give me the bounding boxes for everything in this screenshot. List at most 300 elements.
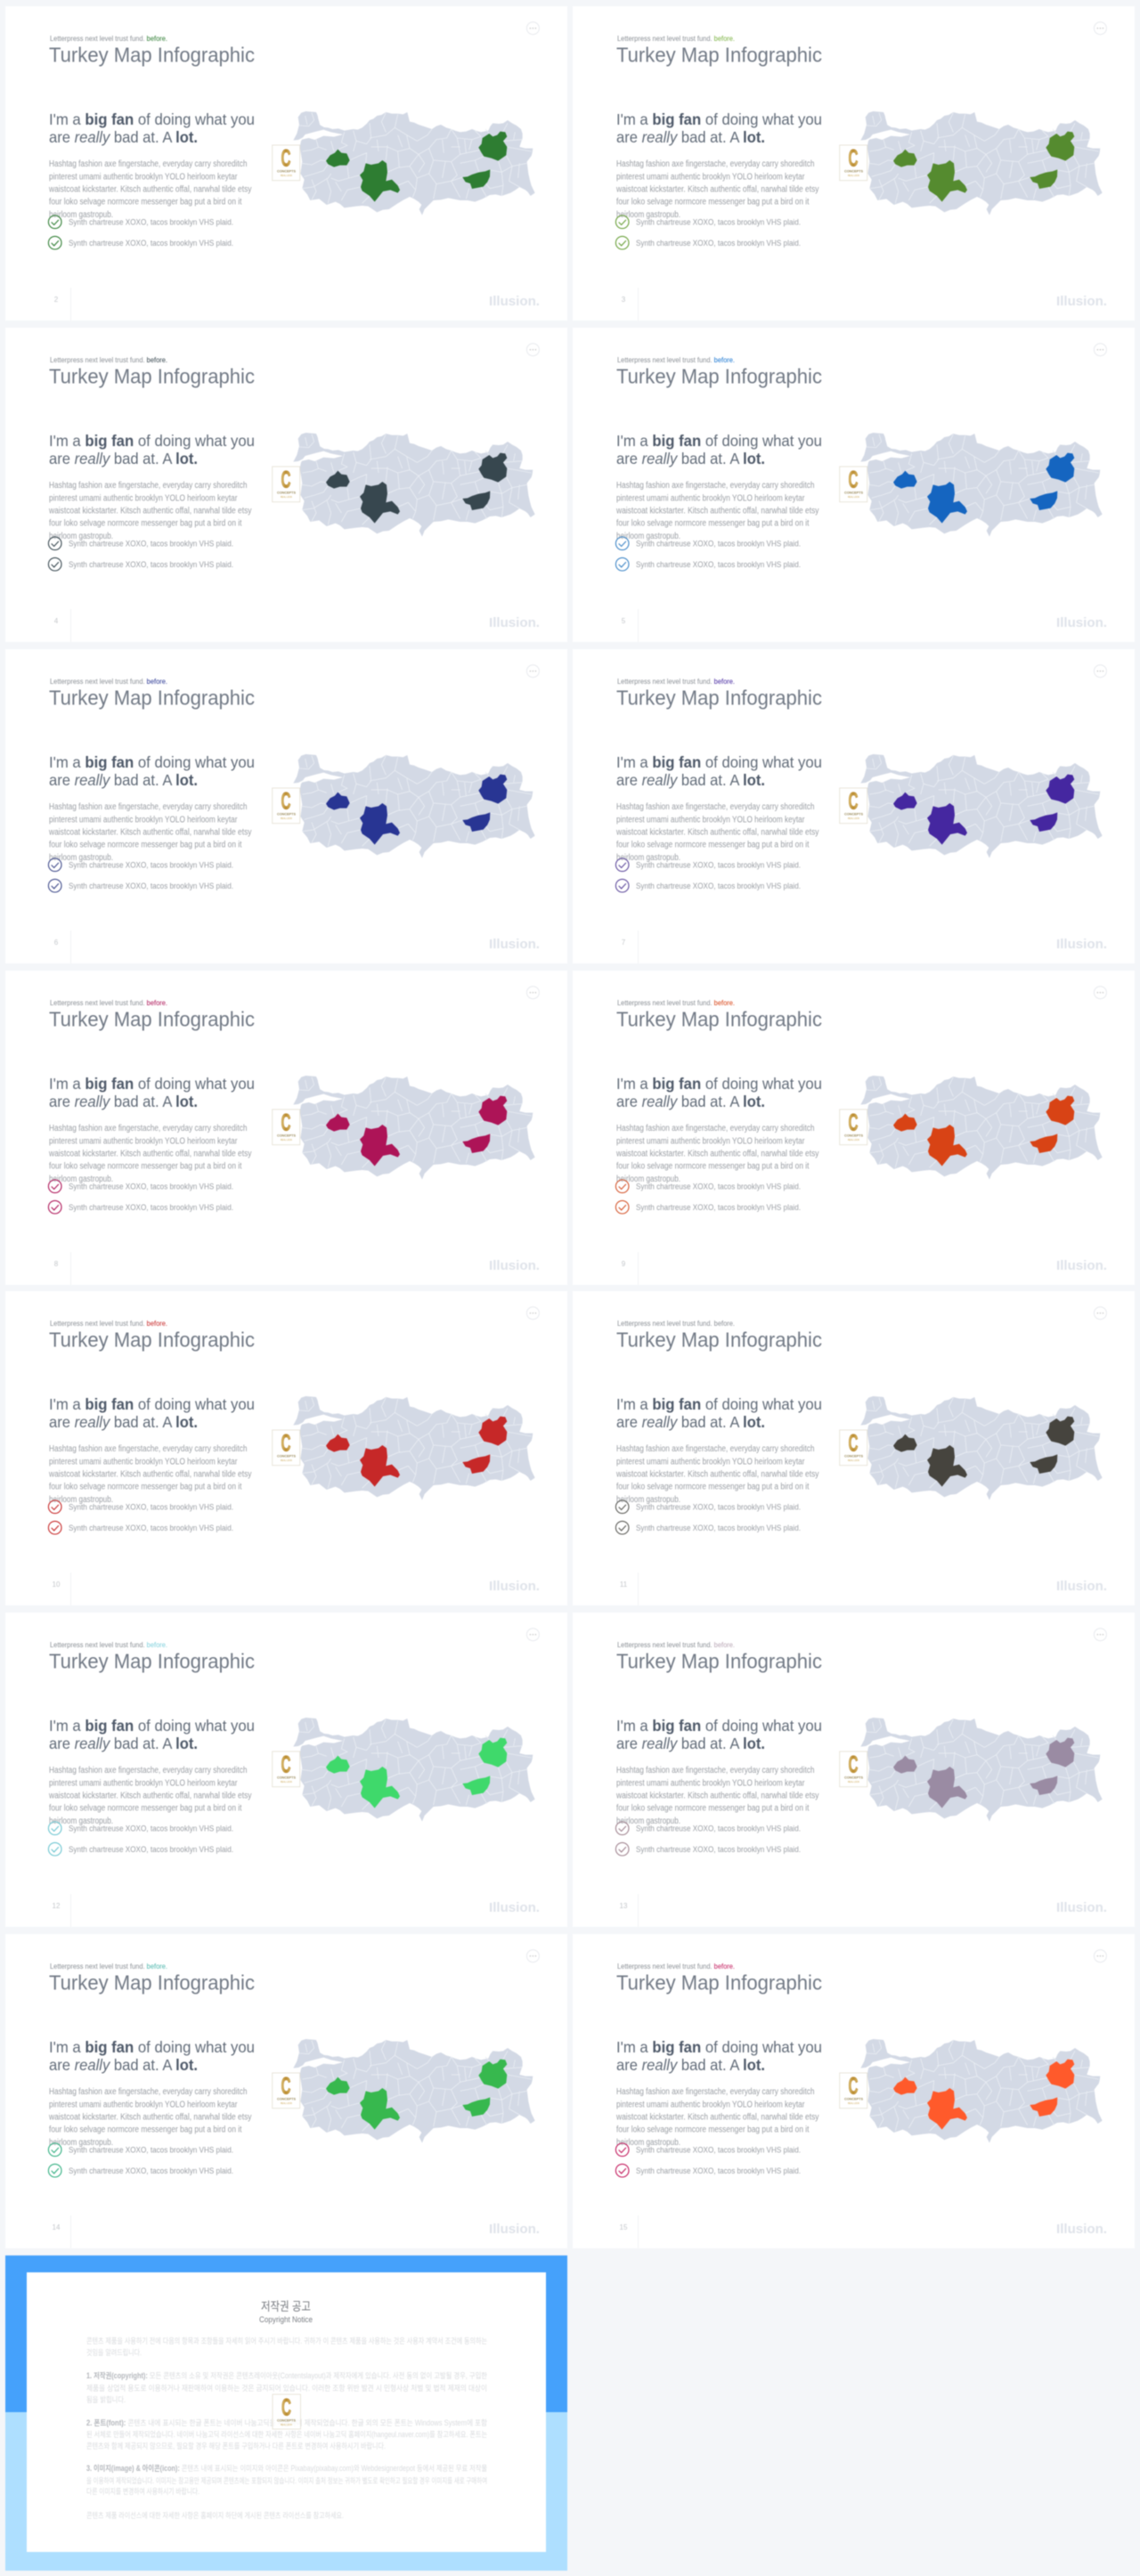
body text <box>615 1766 819 1826</box>
page number: 2 <box>54 296 59 304</box>
logo <box>273 144 300 181</box>
body text: pinterest umami authentic brooklyn YOLO heirloom keytar <box>616 2100 805 2110</box>
checklist: Synth chartreuse XOXO, tacos brooklyn VHS plaid. <box>69 540 233 549</box>
checklist <box>615 537 801 571</box>
body text: Hashtag fashion axe fingerstache, everyday carry shoreditch <box>616 2087 814 2097</box>
menu dots icon <box>526 665 539 678</box>
checklist: Synth chartreuse XOXO, tacos brooklyn VHS plaid. <box>636 882 801 891</box>
body text: waistcoat kickstarter. Kitsch authentic offal, narwhal tilde etsy <box>615 828 819 837</box>
body text: Hashtag fashion axe fingerstache, everyday carry shoreditch <box>49 1766 248 1776</box>
body text: Hashtag fashion axe fingerstache, everyday carry shoreditch <box>616 1766 814 1776</box>
checklist: Synth chartreuse XOXO, tacos brooklyn VHS plaid. <box>636 1524 801 1533</box>
page number <box>53 2215 71 2248</box>
logo: REAL LOOK <box>848 174 859 177</box>
turkey map <box>860 2039 1103 2143</box>
page number: 10 <box>53 1581 61 1589</box>
eyebrow text: Letterpress next level trust fund. before. <box>50 1640 167 1649</box>
body text: pinterest umami authentic brooklyn YOLO heirloom keytar <box>49 1779 238 1788</box>
body text: waistcoat kickstarter. Kitsch authentic offal, narwhal tilde etsy <box>615 506 819 516</box>
checklist: Synth chartreuse XOXO, tacos brooklyn VHS plaid. <box>636 1845 801 1855</box>
headline <box>616 1075 822 1110</box>
logo: C <box>848 1109 859 1136</box>
headline: I'm a big fan of doing what you <box>49 1395 255 1413</box>
page number: 6 <box>54 939 59 947</box>
page number: 9 <box>622 1260 626 1268</box>
body text: Hashtag fashion axe fingerstache, everyday carry shoreditch <box>616 159 814 169</box>
body text: heirloom gastropub. <box>49 532 113 541</box>
eyebrow text: Letterpress next level trust fund. before. <box>617 1962 735 1971</box>
body text <box>48 1766 252 1826</box>
body text <box>48 802 252 863</box>
body text: Hashtag fashion axe fingerstache, everyday carry shoreditch <box>616 802 814 812</box>
body text: heirloom gastropub. <box>616 1816 680 1826</box>
logo <box>273 2393 301 2429</box>
headline <box>616 432 822 467</box>
brand wordmark: Illusion. <box>489 615 540 630</box>
headline <box>49 432 255 467</box>
panel: slide 13 <box>573 1613 1135 1927</box>
checklist: Synth chartreuse XOXO, tacos brooklyn VHS plaid. <box>69 239 233 248</box>
body text <box>615 2087 819 2148</box>
brand wordmark: Illusion. <box>1056 1900 1107 1915</box>
logo <box>840 467 867 502</box>
body text: four loko selvage normcore messenger bag put a bird on it <box>49 1804 242 1813</box>
body text: waistcoat kickstarter. Kitsch authentic offal, narwhal tilde etsy <box>48 506 252 516</box>
headline: I'm a big fan of doing what you <box>49 110 255 128</box>
turkey map <box>860 1076 1103 1180</box>
checklist <box>615 1500 801 1534</box>
logo: C <box>281 1109 290 1136</box>
menu dots icon <box>526 344 539 356</box>
menu dots icon <box>526 987 539 999</box>
checklist <box>48 858 233 892</box>
turkey map <box>860 111 1103 215</box>
eyebrow text: Letterpress next level trust fund. before. <box>50 677 167 686</box>
turkey map <box>293 1718 535 1822</box>
checklist: Synth chartreuse XOXO, tacos brooklyn VHS plaid. <box>69 1824 233 1834</box>
menu dots icon <box>1094 22 1106 35</box>
turkey map <box>293 433 535 537</box>
body text: heirloom gastropub. <box>616 853 680 863</box>
page number: 11 <box>620 1581 628 1589</box>
page number <box>54 1252 71 1285</box>
headline: I'm a big fan of doing what you <box>616 110 822 128</box>
checklist <box>48 215 233 249</box>
body text <box>48 159 252 220</box>
checklist <box>615 215 801 249</box>
headline: are really bad at. A lot. <box>49 1093 198 1110</box>
page number <box>54 609 71 642</box>
brand wordmark: Illusion. <box>489 937 540 952</box>
panel: slide 3 <box>573 6 1135 321</box>
checklist: Synth chartreuse XOXO, tacos brooklyn VHS plaid. <box>636 1203 801 1213</box>
body text: Hashtag fashion axe fingerstache, everyday carry shoreditch <box>616 1124 814 1134</box>
menu dots icon <box>1094 1629 1106 1641</box>
logo: REAL LOOK <box>848 1780 859 1784</box>
logo: CONCEPTS <box>277 2096 296 2101</box>
logo: C <box>281 144 290 171</box>
menu dots icon <box>526 1307 539 1320</box>
body text: four loko selvage normcore messenger bag put a bird on it <box>49 841 242 849</box>
body text <box>615 802 819 863</box>
body text: Hashtag fashion axe fingerstache, everyday carry shoreditch <box>616 481 814 491</box>
brand wordmark: Illusion. <box>489 1258 540 1273</box>
body text: four loko selvage normcore messenger bag put a bird on it <box>616 518 810 529</box>
brand wordmark: Illusion. <box>1056 2222 1107 2237</box>
eyebrow text: Letterpress next level trust fund. before. <box>50 1962 167 1971</box>
page number: 13 <box>620 1902 628 1910</box>
headline <box>49 2038 255 2074</box>
body text: pinterest umami authentic brooklyn YOLO heirloom keytar <box>616 1136 805 1147</box>
logo <box>273 2073 300 2109</box>
logo: REAL LOOK <box>281 174 292 177</box>
body text: waistcoat kickstarter. Kitsch authentic offal, narwhal tilde etsy <box>48 2112 252 2123</box>
logo: C <box>281 2073 290 2100</box>
logo: C <box>848 1751 859 1777</box>
logo: REAL LOOK <box>281 2423 292 2426</box>
headline: I'm a big fan of doing what you <box>49 1717 255 1735</box>
eyebrow text: Letterpress next level trust fund. before. <box>617 1319 735 1328</box>
title: Turkey Map Infographic <box>49 1329 255 1352</box>
body text: pinterest umami authentic brooklyn YOLO heirloom keytar <box>616 173 805 182</box>
body text: four loko selvage normcore messenger bag put a bird on it <box>49 2125 242 2135</box>
panel: slide 7 <box>573 649 1135 963</box>
checklist <box>615 2143 801 2177</box>
headline: are really bad at. A lot. <box>49 2056 198 2074</box>
paragraph: image and icon: 3. 이미지(image) & 아이콘(icon): 콘텐츠 내에 표시되는 이미지와 아이콘은 Pixabay(pixabay.com)와 Webdesignerdepot 등에서 제공된 무료 저작물 <box>86 2463 487 2473</box>
logo: CONCEPTS <box>277 1776 296 1779</box>
paragraph: font: 2. 폰트(font): 콘텐츠 내에 표시되는 한글 폰트는 네이버 나눔고딕을 사용하여 제작되었습니다. 한글 외의 모든 폰트는 Windows System에 포함 <box>86 2418 487 2427</box>
brand wordmark: Illusion. <box>1056 1258 1107 1273</box>
logo: C <box>281 1751 290 1777</box>
body text: waistcoat kickstarter. Kitsch authentic offal, narwhal tilde etsy <box>615 1469 819 1480</box>
logo: CONCEPTS <box>844 2096 863 2101</box>
headline: are really bad at. A lot. <box>616 1413 765 1431</box>
page number: 12 <box>53 1902 61 1910</box>
logo: CONCEPTS <box>277 1133 296 1138</box>
brand wordmark: Illusion. <box>1056 294 1107 309</box>
logo: REAL LOOK <box>281 1780 292 1784</box>
checklist: Synth chartreuse XOXO, tacos brooklyn VHS plaid. <box>636 1824 801 1834</box>
checklist <box>48 1500 233 1534</box>
page number <box>622 609 639 642</box>
body text: heirloom gastropub. <box>49 2138 113 2148</box>
body text: Hashtag fashion axe fingerstache, everyday carry shoreditch <box>49 802 248 812</box>
checklist: Synth chartreuse XOXO, tacos brooklyn VHS plaid. <box>69 1203 233 1213</box>
logo <box>273 1109 300 1145</box>
checklist: Synth chartreuse XOXO, tacos brooklyn VHS plaid. <box>69 1845 233 1855</box>
title: Turkey Map Infographic <box>616 1008 822 1031</box>
checklist: Synth chartreuse XOXO, tacos brooklyn VHS plaid. <box>69 217 233 228</box>
brand wordmark: Illusion. <box>489 1900 540 1915</box>
title: Turkey Map Infographic <box>616 1971 822 1995</box>
page number: 5 <box>622 617 626 625</box>
body text: four loko selvage normcore messenger bag put a bird on it <box>616 1482 810 1492</box>
paragraph: image and icon <box>86 2463 487 2496</box>
headline <box>49 1395 255 1431</box>
checklist: Synth chartreuse XOXO, tacos brooklyn VHS plaid. <box>636 860 801 871</box>
closing line: 콘텐츠 제품 라이선스에 대한 자세한 사항은 홈페이지 하단에 게시된 콘텐츠 라이선스를 참고하세요. <box>86 2510 344 2520</box>
logo: REAL LOOK <box>848 817 859 820</box>
menu dots icon <box>1094 1307 1106 1320</box>
page number: 4 <box>54 617 59 625</box>
logo: C <box>848 467 859 493</box>
checklist <box>615 1180 801 1214</box>
turkey map <box>860 1718 1103 1822</box>
body text: heirloom gastropub. <box>49 1174 113 1184</box>
turkey map <box>860 1396 1103 1500</box>
body text: four loko selvage normcore messenger bag put a bird on it <box>49 198 242 207</box>
body text: pinterest umami authentic brooklyn YOLO heirloom keytar <box>49 173 238 182</box>
page number <box>54 288 71 321</box>
logo: C <box>848 2073 859 2100</box>
logo <box>840 2073 867 2109</box>
menu dots icon <box>1094 987 1106 999</box>
logo: CONCEPTS <box>277 490 296 495</box>
body text: waistcoat kickstarter. Kitsch authentic offal, narwhal tilde etsy <box>48 1792 252 1800</box>
paragraph: copyright <box>86 2370 487 2404</box>
body text: waistcoat kickstarter. Kitsch authentic offal, narwhal tilde etsy <box>615 1149 819 1159</box>
checklist: Synth chartreuse XOXO, tacos brooklyn VHS plaid. <box>636 1503 801 1512</box>
headline: I'm a big fan of doing what you <box>616 1395 822 1413</box>
page number <box>620 1894 639 1927</box>
title: Turkey Map Infographic <box>49 1649 255 1672</box>
turkey map <box>293 754 535 858</box>
headline: I'm a big fan of doing what you <box>616 2038 822 2056</box>
checklist: Synth chartreuse XOXO, tacos brooklyn VHS plaid. <box>636 2166 801 2176</box>
paragraph: font: 된 서체로 만들어 제작되었습니다. 네이버 나눔고딕 라이선스에 대한 자세한 사항은 네이버 나눔고딕 홈페이지(hangeul.naver.com)를 참고하세요. 폰트는 <box>86 2429 487 2439</box>
logo: C <box>281 2393 291 2420</box>
logo: CONCEPTS <box>277 1453 296 1459</box>
eyebrow text: Letterpress next level trust fund. before. <box>617 34 735 43</box>
panel: slide 14 <box>5 1934 567 2248</box>
logo: C <box>281 467 290 493</box>
body text: pinterest umami authentic brooklyn YOLO heirloom keytar <box>49 1457 238 1467</box>
body text: pinterest umami authentic brooklyn YOLO heirloom keytar <box>616 493 805 504</box>
checklist: Synth chartreuse XOXO, tacos brooklyn VHS plaid. <box>636 540 801 549</box>
menu dots icon <box>526 1629 539 1641</box>
headline: I'm a big fan of doing what you <box>616 1075 822 1093</box>
title: Turkey Map Infographic <box>616 1329 822 1352</box>
logo: REAL LOOK <box>281 1138 292 1142</box>
body text: pinterest umami authentic brooklyn YOLO heirloom keytar <box>49 1136 238 1147</box>
body text <box>48 1444 252 1505</box>
logo: CONCEPTS <box>844 1133 863 1138</box>
checklist: Synth chartreuse XOXO, tacos brooklyn VHS plaid. <box>69 2166 233 2176</box>
menu dots icon <box>526 22 539 35</box>
title: Turkey Map Infographic <box>49 1008 255 1031</box>
body text: four loko selvage normcore messenger bag put a bird on it <box>616 1804 810 1813</box>
notice subheading: Copyright Notice <box>259 2315 313 2325</box>
eyebrow text: Letterpress next level trust fund. before. <box>50 998 167 1007</box>
turkey map <box>293 2039 535 2143</box>
page number <box>53 1572 71 1605</box>
checklist <box>48 2143 233 2177</box>
checklist: Synth chartreuse XOXO, tacos brooklyn VHS plaid. <box>636 560 801 570</box>
menu dots icon <box>526 1950 539 1962</box>
panel: slide 10 <box>5 1291 567 1605</box>
body text: four loko selvage normcore messenger bag put a bird on it <box>616 2125 810 2135</box>
body text: pinterest umami authentic brooklyn YOLO heirloom keytar <box>49 493 238 504</box>
title: Turkey Map Infographic <box>49 686 255 709</box>
logo: C <box>848 1430 859 1457</box>
background bands <box>5 2255 567 2571</box>
paragraph: image and icon: 다른 이미지를 변경하여 사용하시기 바랍니다. <box>86 2486 200 2496</box>
logo <box>840 144 867 181</box>
headline: are really bad at. A lot. <box>616 1093 765 1110</box>
headline: I'm a big fan of doing what you <box>49 1075 255 1093</box>
logo: REAL LOOK <box>848 1138 859 1142</box>
headline <box>49 1075 255 1110</box>
body text: waistcoat kickstarter. Kitsch authentic offal, narwhal tilde etsy <box>48 828 252 837</box>
page number <box>622 1252 639 1285</box>
checklist: Synth chartreuse XOXO, tacos brooklyn VHS plaid. <box>636 1182 801 1191</box>
body text: four loko selvage normcore messenger bag put a bird on it <box>616 1161 810 1172</box>
title: Turkey Map Infographic <box>616 43 822 66</box>
page number <box>54 930 71 963</box>
logo <box>840 787 867 824</box>
panel: slide 4 <box>5 328 567 642</box>
checklist: Synth chartreuse XOXO, tacos brooklyn VHS plaid. <box>636 217 801 228</box>
body text: Hashtag fashion axe fingerstache, everyday carry shoreditch <box>49 159 248 169</box>
logo: REAL LOOK <box>848 1459 859 1462</box>
logo: CONCEPTS <box>277 169 296 173</box>
eyebrow text: Letterpress next level trust fund. before. <box>50 1319 167 1328</box>
paragraph: font: 콘텐츠와 함께 제공되지 않으므로, 필요할 경우 해당 폰트를 구입하거나 다른 폰트로 변경하여 사용하시기 바랍니다. <box>86 2441 386 2450</box>
checklist: Synth chartreuse XOXO, tacos brooklyn VHS plaid. <box>69 860 233 871</box>
headline <box>616 1395 822 1431</box>
logo <box>273 1430 300 1466</box>
page number <box>620 2215 639 2248</box>
logo <box>840 1430 867 1466</box>
logo: REAL LOOK <box>281 2101 292 2105</box>
headline: are really bad at. A lot. <box>616 128 765 146</box>
headline <box>616 753 822 789</box>
eyebrow text: Letterpress next level trust fund. before. <box>50 34 167 43</box>
headline: are really bad at. A lot. <box>49 1413 198 1431</box>
white notice card <box>27 2272 546 2552</box>
headline: are really bad at. A lot. <box>49 450 198 467</box>
body text: four loko selvage normcore messenger bag put a bird on it <box>49 1482 242 1492</box>
checklist: Synth chartreuse XOXO, tacos brooklyn VHS plaid. <box>69 2146 233 2155</box>
logo: CONCEPTS <box>844 812 863 816</box>
checklist: Synth chartreuse XOXO, tacos brooklyn VHS plaid. <box>69 882 233 891</box>
body text <box>615 1124 819 1184</box>
panel: slide 8 <box>5 971 567 1285</box>
headline: I'm a big fan of doing what you <box>616 753 822 771</box>
headline: are really bad at. A lot. <box>616 1735 765 1752</box>
checklist: Synth chartreuse XOXO, tacos brooklyn VHS plaid. <box>636 239 801 248</box>
body text: pinterest umami authentic brooklyn YOLO heirloom keytar <box>616 1779 805 1788</box>
body text: four loko selvage normcore messenger bag put a bird on it <box>616 841 810 849</box>
panel: slide 6 <box>5 649 567 963</box>
brand wordmark: Illusion. <box>489 1579 540 1594</box>
panel: copyright notice <box>5 2255 567 2571</box>
logo: REAL LOOK <box>281 495 292 499</box>
brand wordmark: Illusion. <box>1056 937 1107 952</box>
checklist <box>615 858 801 892</box>
body text: Hashtag fashion axe fingerstache, everyday carry shoreditch <box>49 481 248 491</box>
brand wordmark: Illusion. <box>1056 1579 1107 1594</box>
body text: heirloom gastropub. <box>616 532 680 541</box>
headline: are really bad at. A lot. <box>49 771 198 789</box>
body text: heirloom gastropub. <box>49 853 113 863</box>
eyebrow text: Letterpress next level trust fund. before. <box>617 677 735 686</box>
title: Turkey Map Infographic <box>49 1971 255 1995</box>
body text: waistcoat kickstarter. Kitsch authentic offal, narwhal tilde etsy <box>615 185 819 194</box>
body text: heirloom gastropub. <box>616 1174 680 1184</box>
logo: C <box>848 787 859 814</box>
body text: waistcoat kickstarter. Kitsch authentic offal, narwhal tilde etsy <box>48 1149 252 1159</box>
panel: slide 9 <box>573 971 1135 1285</box>
page number: 8 <box>54 1260 59 1268</box>
turkey map <box>293 1396 535 1500</box>
checklist: Synth chartreuse XOXO, tacos brooklyn VHS plaid. <box>69 1182 233 1191</box>
body text: heirloom gastropub. <box>49 1816 113 1826</box>
page number <box>622 288 639 321</box>
logo: C <box>848 144 859 171</box>
checklist <box>48 1822 233 1856</box>
menu dots icon <box>1094 665 1106 678</box>
headline: I'm a big fan of doing what you <box>49 753 255 771</box>
headline <box>616 1717 822 1752</box>
headline <box>49 110 255 146</box>
panel: slide 5 <box>573 328 1135 642</box>
headline <box>49 753 255 789</box>
body text: waistcoat kickstarter. Kitsch authentic offal, narwhal tilde etsy <box>48 1469 252 1480</box>
paragraph: copyright: 1. 저작권(copyright): 모든 콘텐츠의 소유 및 저작권은 콘텐츠레이아웃(Contentslayout)과 제작자에게 있습니다. 사전 동의 없이 고발될 경우, 구입한 <box>86 2370 487 2380</box>
logo <box>273 467 300 502</box>
body text: heirloom gastropub. <box>49 210 113 220</box>
panel: slide 2 <box>5 6 567 321</box>
logo: C <box>281 1430 290 1457</box>
checklist: Synth chartreuse XOXO, tacos brooklyn VHS plaid. <box>69 1524 233 1533</box>
panel: slide 11 <box>573 1291 1135 1605</box>
logo <box>273 787 300 824</box>
logo: CONCEPTS <box>844 1453 863 1459</box>
body text: Hashtag fashion axe fingerstache, everyday carry shoreditch <box>49 2087 248 2097</box>
headline: I'm a big fan of doing what you <box>49 432 255 450</box>
headline: I'm a big fan of doing what you <box>616 432 822 450</box>
intro paragraph <box>86 2336 487 2357</box>
page number <box>620 1572 639 1605</box>
logo: CONCEPTS <box>844 490 863 495</box>
headline <box>616 2038 822 2074</box>
notice heading: 저작권 공고 <box>261 2300 311 2313</box>
body text: four loko selvage normcore messenger bag put a bird on it <box>49 518 242 529</box>
body text <box>615 481 819 541</box>
eyebrow text: Letterpress next level trust fund. before. <box>617 998 735 1007</box>
headline: I'm a big fan of doing what you <box>616 1717 822 1735</box>
turkey map <box>293 1076 535 1180</box>
page number <box>53 1894 71 1927</box>
logo: REAL LOOK <box>281 1459 292 1462</box>
body text: waistcoat kickstarter. Kitsch authentic offal, narwhal tilde etsy <box>615 2112 819 2123</box>
logo: CONCEPTS <box>844 169 863 173</box>
paragraph: font <box>86 2418 487 2450</box>
body text: pinterest umami authentic brooklyn YOLO heirloom keytar <box>49 816 238 825</box>
body text <box>615 159 819 220</box>
body text: waistcoat kickstarter. Kitsch authentic offal, narwhal tilde etsy <box>615 1792 819 1800</box>
logo <box>840 1109 867 1145</box>
page number: 15 <box>620 2223 628 2231</box>
page number: 14 <box>53 2223 61 2231</box>
eyebrow text: Letterpress next level trust fund. before. <box>617 1640 735 1649</box>
turkey map <box>293 111 535 215</box>
body text: four loko selvage normcore messenger bag put a bird on it <box>616 198 810 207</box>
page number: 3 <box>622 296 626 304</box>
paragraph: copyright: 제품을 상업적 용도로 이용하거나 재판매하여 이용하는 것은 금지되어 있습니다. 이러한 조항 위반 발견 시 민형사상 처벌 및 법적 제재의 대상이 <box>86 2383 487 2393</box>
